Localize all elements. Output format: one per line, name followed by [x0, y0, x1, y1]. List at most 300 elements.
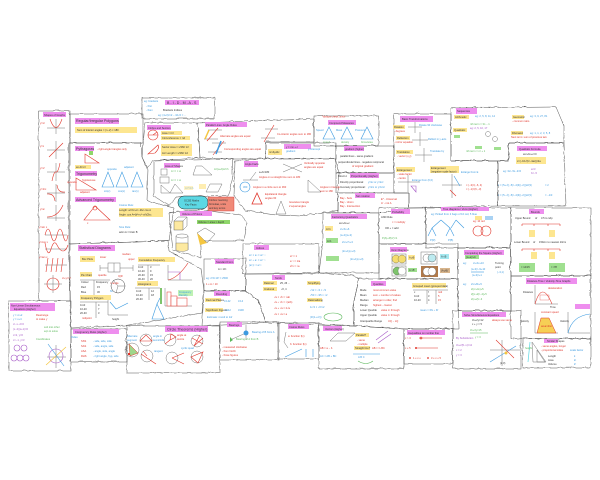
chart: box plot: IQR [118, 274, 123, 278]
text: index laws: a⁰ = 1 [290, 254, 297, 258]
diagram: circle theorem 1 [125, 334, 139, 357]
graph: exponential [40, 205, 65, 221]
panel: shapes of graphs [38, 110, 71, 300]
table: grouped frequency: 4 [428, 298, 430, 302]
text: bearing rules: - measured clockwise [222, 345, 247, 349]
text: equations: eqn to solve [44, 329, 59, 333]
text: surd laws: √a + √a = 2√a [274, 306, 291, 310]
text: elimination: y = 3 [475, 335, 481, 339]
diagram: venn union: A∪B [409, 256, 415, 260]
text: standard form [206, 267, 228, 286]
text: factorising [325, 221, 364, 261]
text: vector notes [355, 331, 391, 346]
diagram: vertically opposite angles: Vertically opposite [304, 161, 325, 165]
text: quartile definitions: Upper Quartile [360, 313, 377, 317]
panel: tree diagrams [425, 207, 510, 247]
graph: tangent [39, 255, 67, 272]
text: rotation: Rotation [394, 125, 404, 129]
text: first example: (x+3)²+1 [472, 273, 482, 277]
diagram: equilateral triangle [252, 192, 287, 204]
panel: factorising quadratics [318, 212, 378, 272]
text: rotation: - degrees [394, 129, 406, 133]
panel: surds [245, 272, 358, 325]
diagram: bearings: Bearing of A from B [236, 337, 259, 341]
panel: gradient [335, 145, 393, 172]
heading: quartiles: Quartiles [373, 282, 384, 286]
text: similar triangles: - proportional sides [541, 348, 564, 352]
text: quartile definitions: value ¼ through [381, 308, 400, 312]
text: standard form: 1 ≤ A < 10 [206, 282, 218, 286]
text: factorising: 2x²+7x+3 [342, 240, 353, 244]
text: reflection: - mirror equation [394, 140, 414, 144]
text: elimination: 3x+2y=12 [472, 318, 484, 322]
diagram: isosceles triangle: Isosceles triangle [289, 200, 310, 204]
heading: distance-time: Distance-Time / Velocity-Time Graphs [527, 279, 571, 283]
text: bearing rules [222, 345, 247, 357]
heading: non-linear [10, 303, 55, 311]
text: elimination: x + y = 5 [472, 322, 483, 326]
table: grouped frequency [413, 290, 448, 312]
callout: red note: Circles: learning [209, 198, 228, 202]
text: probability rules: × = multiply [392, 220, 406, 224]
text: enlargement: - centre [397, 176, 406, 180]
text: substitution: By Substitution [456, 336, 474, 340]
text: cosine and sine rule: Angle: cos A=(b²+c²−a²)/2bc [119, 212, 152, 216]
graph: velocity time [520, 310, 559, 333]
heading: pythagoras: Pythagoras [76, 147, 94, 151]
diagram: circle theorem 3: tangent [154, 349, 163, 353]
text: geometric: - common ratio [512, 119, 530, 123]
text: rounding: 3100 [238, 308, 244, 312]
diagram: circle theorem 4: centre [177, 337, 185, 341]
text: first example: (−3,1) [497, 270, 504, 274]
panel: circles and sectors [141, 122, 199, 168]
table: cumulative frequency: 10-20 [138, 269, 145, 273]
text: rounding [205, 298, 244, 319]
panel: averages [450, 106, 563, 160]
label: general form: (x+a)²+b [466, 255, 476, 259]
table: frequency polygon: 10-20 [80, 307, 87, 311]
formula: area and circumference: Area = πr² [162, 131, 174, 135]
text: rounding: 3.142 [224, 299, 231, 303]
formula: quadratic: x=(−b±√(b²−4ac))/2a [517, 159, 541, 163]
text: substitution: x = 2 [456, 348, 462, 352]
chart: box plot: upper [128, 257, 135, 261]
text: set notation [340, 196, 397, 208]
text: second example: 2[(x+2)²−4]+5 [471, 292, 487, 296]
text: simplifying and rationalising [307, 281, 342, 321]
text: similar triangles: Volume [548, 362, 557, 366]
text: straight line proof: AB = ¾ BC [372, 346, 385, 350]
graph: cosine: y=cos x [39, 241, 49, 244]
text: lower bound: 150cm to nearest 10cm [539, 240, 566, 244]
graph: tangent: y=tan x [39, 255, 48, 259]
table: grouped frequency: mid [438, 290, 443, 294]
heading: area of shapes: Area of Shapes [165, 164, 184, 168]
panel: cosine rules [277, 322, 318, 358]
text: simplifying and rationalising: Simplifying [308, 281, 321, 285]
diagram: cylinder [176, 234, 188, 252]
diagram: SOH CAH TOA triangles: adjacent [124, 165, 134, 169]
text: congruency rules: - right angle, hyp, side [93, 354, 119, 358]
diagram: isosceles triangle [276, 200, 310, 214]
diagram: formula triangles: force/area [361, 140, 373, 144]
diagram: trig triangle: hypotenuse [82, 178, 96, 182]
text: quartile definitions [360, 288, 401, 323]
graph: velocity time: area=dist [541, 324, 552, 328]
text: cosine and sine rule: a/sin A = b/sin B [119, 230, 138, 234]
table: frequency polygon: 4 [98, 303, 100, 307]
diagram: similar triangles: height [525, 346, 532, 350]
diagram: rule sketch [284, 332, 313, 357]
text: equations: y = x²+2 [13, 313, 23, 317]
heading: parallel lines: Parallel Lines: Angle Rules [206, 123, 238, 127]
text: rounding: 3.14 [238, 299, 244, 303]
diagram: circle theorem 7: cyclic quad [181, 346, 194, 350]
chart: box plot: quartile [98, 273, 107, 277]
diagram: circle theorem 4: angle at [177, 333, 187, 337]
text: quartile definitions: Median [360, 298, 369, 302]
diagram: circle theorem 1: Alternate [127, 334, 138, 338]
text: straight line proof [353, 346, 385, 364]
text: quartile definitions: arrange in order, find [373, 298, 397, 302]
text: elimination [470, 318, 512, 339]
text: bearing rules: - from North [222, 349, 236, 353]
text: proportion formulas: y=k/x or y=k/x² [368, 185, 385, 189]
diagram: sector [148, 145, 159, 154]
panel: bearings [219, 321, 278, 359]
chart: cumulative curve [168, 263, 192, 280]
table: frequency polygon: 20-30 [80, 311, 87, 315]
text: upper bound: 3.5 to 1dp [541, 216, 553, 220]
text: equations: x²−x−2=0 [13, 322, 24, 326]
table: frequency polygon [80, 302, 108, 320]
graph: distance time: deceleration [548, 286, 563, 290]
formula: sector: Sector Area = x/360 πr² [162, 145, 189, 149]
diagram: squares: A = l × w [171, 178, 181, 182]
text: probability rules: P(A)+P(A')=1 [382, 236, 398, 240]
text: negative enlargement: × (−3)=(−6, 4) [466, 183, 482, 187]
heading: indices: Indices [256, 246, 265, 250]
text: set notation: A' - not A [381, 201, 392, 205]
panel: quadratic formula [497, 142, 565, 205]
text: equations [13, 313, 60, 342]
text: index laws: a⁻¹ = 1/a [290, 259, 301, 263]
diagram: angles on a line: Angles on a straight line sum to 180 [259, 175, 301, 179]
formula: sector [161, 144, 192, 156]
text: negative enlargement: (negative scale factor) [431, 169, 457, 173]
panel: statistical diagrams [68, 240, 203, 327]
text: congruency rules: - side, angle, side [93, 344, 114, 348]
text: equations: Rearrange [36, 313, 49, 317]
graph: speed curve: Velocity [560, 319, 570, 323]
table: pie chart: Red [81, 285, 86, 289]
table: frequency polygon: 3 [98, 311, 100, 315]
text: simplifying and rationalising: Rationalising [308, 298, 323, 302]
diagram: circle theorem 2: semicircle [153, 338, 165, 342]
panel: quartiles [353, 278, 458, 328]
text: worked example: b=−5 [531, 171, 537, 175]
text: negative enlargement: Enlarge from E [461, 170, 479, 174]
text: cosine and sine rule: Sine Rule: [119, 225, 131, 229]
heading: shapes of graphs [43, 112, 66, 117]
text: negative enlargement: Enlargement [431, 166, 446, 170]
chart: histogram [165, 288, 193, 306]
graph: velocity time: Velocity [520, 319, 530, 323]
diagram: probability trees [428, 220, 464, 242]
text: BIDMAS examples: - first [146, 104, 152, 108]
text: standard form: eg: 2.5×10³ = 2500 [206, 276, 228, 280]
text: quartile definitions: Lower Quartile [360, 308, 377, 312]
heading: bearings: Bearings [229, 323, 240, 327]
callout: red note: and key terms [209, 206, 226, 210]
heading: compound measures: Compound Measures [329, 121, 355, 125]
diagram: angles at a point: Angles in a circle sum to 360 [253, 185, 287, 189]
table: histogram: 18 [151, 293, 154, 297]
graph: quadratic [40, 119, 65, 134]
diagram: squares [160, 169, 181, 183]
text: probability rules [381, 215, 406, 240]
heading: set notation: Set notation [356, 194, 370, 198]
diagram: probability trees: P(R) [430, 238, 435, 242]
heading: trigonometry: Trigonometry [76, 172, 97, 176]
text: upper bound: Upper Bound [515, 216, 531, 220]
chart: frequency polygon: height [112, 317, 119, 321]
text: rational and irrational [263, 281, 290, 291]
heading: polygons: Regular/Irregular Polygons [76, 119, 119, 123]
graph: cubic [40, 163, 65, 181]
graph: circle [44, 275, 71, 293]
diagram: SOH CAH TOA triangles: sin(x) [104, 189, 110, 193]
heading: sequences: Sequences [457, 109, 471, 113]
heading: vectors: Vectors (Higher) [325, 327, 344, 331]
formula: gradient: gradient [286, 149, 296, 153]
text: quartile definitions: sum ÷ number of values [373, 293, 401, 297]
panel: distance-time graphs [510, 275, 590, 338]
diagram: venn intersect: A∩B [441, 254, 447, 258]
text: vector notes: - same [357, 339, 365, 342]
panel: rounding [201, 290, 265, 325]
heading: probability: Probability [392, 210, 405, 214]
heading: circles and sectors: Circles and Sectors [148, 126, 171, 130]
diagram: trig triangle [67, 178, 96, 194]
text: quartile definitions: Range [360, 303, 368, 307]
diagram: venn complement: A∩B' [409, 268, 415, 272]
table: cumulative frequency: 20 [150, 277, 153, 281]
table: grouped frequency: 15 [438, 298, 441, 302]
text: second example [463, 282, 487, 301]
text: vector notes: Parallel? [356, 333, 367, 337]
text: rotation [393, 122, 443, 133]
diagram: formula triangles [316, 127, 373, 144]
text: simplifying and rationalising: (3/(1+√2)) [310, 315, 322, 319]
table: grouped frequency: 5 [438, 294, 440, 298]
panel: venn diagrams [378, 243, 457, 278]
text: simplifying and rationalising: √50 = √25 × √2 [310, 293, 328, 297]
heading: non-linear: Equations (Higher) [14, 307, 36, 311]
graph: distance time [523, 285, 563, 309]
panel: probability [378, 207, 425, 243]
diagram: alternate angles: Alternate angles are equal [220, 134, 251, 138]
callout: GCSE maths key facts [178, 196, 208, 209]
heading: factorising: Factorising Quadratics [332, 215, 359, 219]
text: first example: Turning [495, 261, 504, 265]
graph: sine [39, 225, 68, 241]
text: congruency rules: RHS [81, 354, 87, 358]
text: similar triangles: scale factor [570, 348, 583, 352]
chart: box plot: lower [100, 255, 106, 259]
panel: indices [242, 243, 318, 273]
heading: proportionality: Proportionality (Higher) [351, 174, 378, 178]
diagram: venn: eg: 10 red [473, 219, 485, 223]
heading: shapes of graphs: Shapes of Graphs [44, 113, 66, 117]
text: similar triangles: Length [548, 354, 556, 358]
heading: tree diagrams: Tree diagrams / Venn (Higher) [443, 207, 478, 211]
panel: y=mx+c [265, 142, 335, 158]
text: quadratic sequences: nth term = n² + 1 [466, 149, 486, 153]
text: equations: x=−1, y=3 [13, 338, 25, 342]
text: equations: (x−2)(x+1)=0 [13, 327, 28, 331]
graph: circle: x²+y²=r² [62, 276, 71, 280]
text: quadratic sequences: eg: 2, 5, 10, 17 [470, 126, 488, 130]
text: lower bound [514, 240, 566, 259]
table: cumulative frequency: 0-10 [138, 265, 144, 269]
text: worked example: = −1/3 [545, 193, 553, 197]
table: pie chart: × angle [110, 281, 119, 285]
text: reflection: Reflection [397, 136, 409, 140]
panel: bounds [510, 207, 590, 275]
text: second example: 2(x+2)²−3 [471, 297, 483, 301]
chart: box plot [98, 252, 135, 278]
text: elimination: always use same [492, 318, 512, 322]
heading: grouped mean: Grouped mean (grouped data) [413, 284, 448, 288]
fractions: bounds results: = 14/15 [521, 265, 530, 269]
callout: GCSE maths key facts: Key Facts [185, 202, 197, 206]
panel: angle facts [233, 158, 340, 215]
table: cumulative frequency: 30-40 [138, 277, 145, 281]
text: rotation: Rotate 90 clockwise [419, 123, 443, 127]
text: index laws: aᵐ × aⁿ = aᵐ⁺ⁿ [249, 253, 266, 257]
heading: angle facts: Angle Facts [245, 162, 259, 166]
diagram: circle theorem 1: segment [127, 338, 137, 342]
text: geometric: Geometric [513, 115, 526, 119]
text: factorising: A≠1 [327, 239, 332, 243]
text: reflection: Reflect in y-axis [428, 137, 447, 141]
diagram: prism [197, 228, 215, 245]
table: cumulative frequency: 15 [150, 273, 153, 277]
heading: venn diagrams: Venn Diagrams [391, 248, 409, 252]
text: set notation: Bay - Intersection [340, 204, 361, 208]
fractions: bounds results: = 7/8 [551, 265, 557, 269]
graph: distance time: Time [550, 305, 556, 309]
diagram: circle theorem 2: angle in [153, 334, 163, 338]
diagram: cube [174, 217, 187, 230]
number line: third: 3 ≤ x ≤ 5 [431, 356, 441, 360]
text: fibonacci: Next term: sum of previous two [511, 135, 547, 139]
heading: simultaneous equations: Solve Simultaneous Equations [464, 313, 500, 317]
heading: completing the square: Completing the Square (Higher) [465, 251, 502, 255]
panel: regular and irregular polygons [69, 113, 142, 142]
diagram: right triangle [85, 151, 99, 163]
table: frequency polygon: 7 [98, 307, 100, 311]
label: pie chart: Pie Chart [81, 273, 92, 277]
diagram: corresponding angles: Corresponding angles are equal [224, 147, 261, 151]
text: simplifying and rationalising: 1/√2 × √2/√2 [310, 305, 325, 309]
text: vector notes: - multiple [357, 342, 368, 346]
text: congruency rules: Rules [71, 335, 78, 339]
text: equations: y = x+4 [13, 317, 22, 321]
text: worked example: x = (5−√((−5)²−4(3)(−2)))/2(3) [498, 193, 532, 197]
text: gradient rules: of original gradient [352, 164, 374, 168]
label: histograms: Histograms [138, 282, 152, 286]
diagram: triangles: A=½bh [185, 186, 194, 190]
heading: statistical diagrams: Statistical Diagrams [79, 246, 111, 250]
graph: linear [40, 141, 65, 159]
diagram: circle theorem 6 [191, 335, 203, 347]
diagram: formula triangles: Mass [336, 128, 343, 132]
table: grouped frequency: x [414, 291, 416, 294]
text: first example [463, 261, 504, 277]
panel: standard form [203, 258, 245, 290]
panel: area of shapes [153, 158, 232, 205]
text: first example: eg: [463, 262, 467, 265]
text: rational and irrational: Irrational [264, 287, 275, 291]
heading: quadratic formula: Quadratic Formula [519, 147, 541, 151]
panel: similar triangles [522, 338, 590, 367]
table: cumulative frequency: 20-30 [138, 273, 145, 277]
diagram: density triangle [152, 298, 164, 319]
diagram: trig triangle: adjacent [80, 190, 90, 194]
table: pie chart: Frequency [96, 280, 109, 284]
text: translation: - vector (x,y) [397, 154, 412, 158]
formula: pythagoras: a²+b²=c² [76, 165, 86, 169]
text: factorising: A=1 [326, 227, 331, 231]
text: similar triangles [541, 339, 583, 366]
text: arithmetic [454, 114, 496, 126]
text: quartile definitions: highest − lowest [373, 303, 392, 307]
text: quartile definitions: Mean [360, 293, 367, 297]
text: rounding: Estimate: round to 1sf [207, 315, 233, 319]
diagram: circle theorem 4 [164, 333, 187, 346]
text: BIDMAS examples: eg: brackets [144, 99, 159, 103]
formula: gradient [268, 147, 320, 155]
formula: interior angles: Sum of interior angles = (n−2) × 180 [77, 128, 119, 132]
diagram: angles on a line: a+b=180 [259, 170, 270, 174]
formula: volume: Volume = area × depth [198, 220, 225, 224]
table: grouped frequency: 10-20 [414, 298, 421, 302]
formula: quadratic [516, 152, 546, 164]
table: pie chart: Colour [81, 280, 89, 284]
heading: advanced trigonometry: Advanced Trigonometry [76, 198, 114, 202]
table: grouped frequency: 3 [428, 294, 430, 298]
heading: basic transformations: Basic Transformations [402, 117, 428, 121]
text: upper bound: of [535, 216, 537, 220]
panel: simultaneous equations [452, 310, 520, 368]
chart: pie chart [111, 279, 125, 293]
text: enlargement: Enlarge from (0,0) [412, 178, 433, 182]
text: cosine and sine rule: Length: a²=b²+c²−2bc cos A [119, 208, 151, 212]
graph: purple circles [11, 345, 29, 361]
text: substitution: 3x+2(5−x)=12 [456, 343, 473, 347]
text: arithmetic: nth term = 3n − 1 [470, 122, 490, 126]
text: factorising: (x+2)(x+3) [340, 233, 352, 237]
text: similar triangles: Area [548, 358, 554, 362]
text: fibonacci: Fibonacci [512, 131, 524, 135]
diagram: SOH CAH TOA triangles [102, 165, 143, 193]
text: quartile definitions: UQ − LQ [388, 319, 398, 323]
chart: histogram: Frequency [179, 290, 192, 294]
text: BIDMAS examples: - then [146, 108, 153, 112]
